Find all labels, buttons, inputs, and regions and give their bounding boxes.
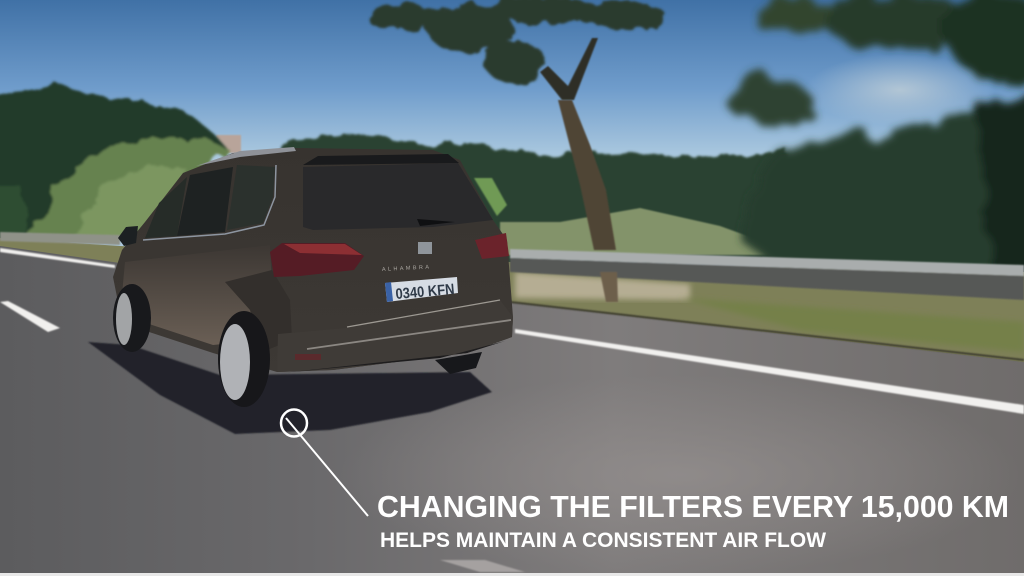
- left tree mass: [0, 82, 230, 240]
- pine tree crown and trunk: [367, 0, 666, 250]
- lighter patch on the road: [340, 375, 1020, 575]
- callout marker and leader line: [281, 410, 368, 516]
- sky: [0, 0, 1024, 300]
- model name: ALHAMBRA: [382, 264, 432, 273]
- car shadow: [88, 342, 492, 434]
- hazy sky between blurred branches: [805, 54, 995, 126]
- far rear tyre: [435, 352, 482, 374]
- badge: [418, 242, 432, 254]
- sunlit bush and pale grass by the rail: [474, 178, 800, 255]
- rear wheel: [218, 311, 270, 407]
- distant tree line: [280, 133, 790, 262]
- rear window: [303, 163, 493, 230]
- blurred tree mass on the right: [728, 0, 1024, 280]
- rear fender: [225, 270, 292, 352]
- door panels with reflections: [122, 245, 272, 345]
- callout subheading: HELPS MAINTAIN A CONSISTENT AIR FLOW: [380, 528, 827, 552]
- right tail light: [475, 233, 509, 259]
- road edge darker seam: [510, 302, 1024, 360]
- guard rail: [0, 232, 1024, 302]
- roadside verge: [0, 238, 1024, 370]
- roof rail: [196, 147, 296, 166]
- spoiler: [303, 154, 459, 165]
- building behind trees: [216, 135, 241, 153]
- bumper: [277, 300, 513, 372]
- callout heading: CHANGING THE FILTERS EVERY 15,000 KM: [377, 489, 1009, 524]
- left tail light: [270, 243, 364, 277]
- road surface: [0, 246, 1024, 576]
- front wheel: [113, 284, 151, 352]
- wiper: [417, 219, 455, 226]
- bottom edge strip: [0, 573, 1024, 576]
- side windows: [143, 165, 276, 240]
- car body: [113, 148, 513, 372]
- car: [113, 147, 513, 407]
- road markings: [0, 248, 1024, 572]
- mirror: [118, 226, 138, 246]
- number plate: 0340 KFN: [395, 281, 455, 303]
